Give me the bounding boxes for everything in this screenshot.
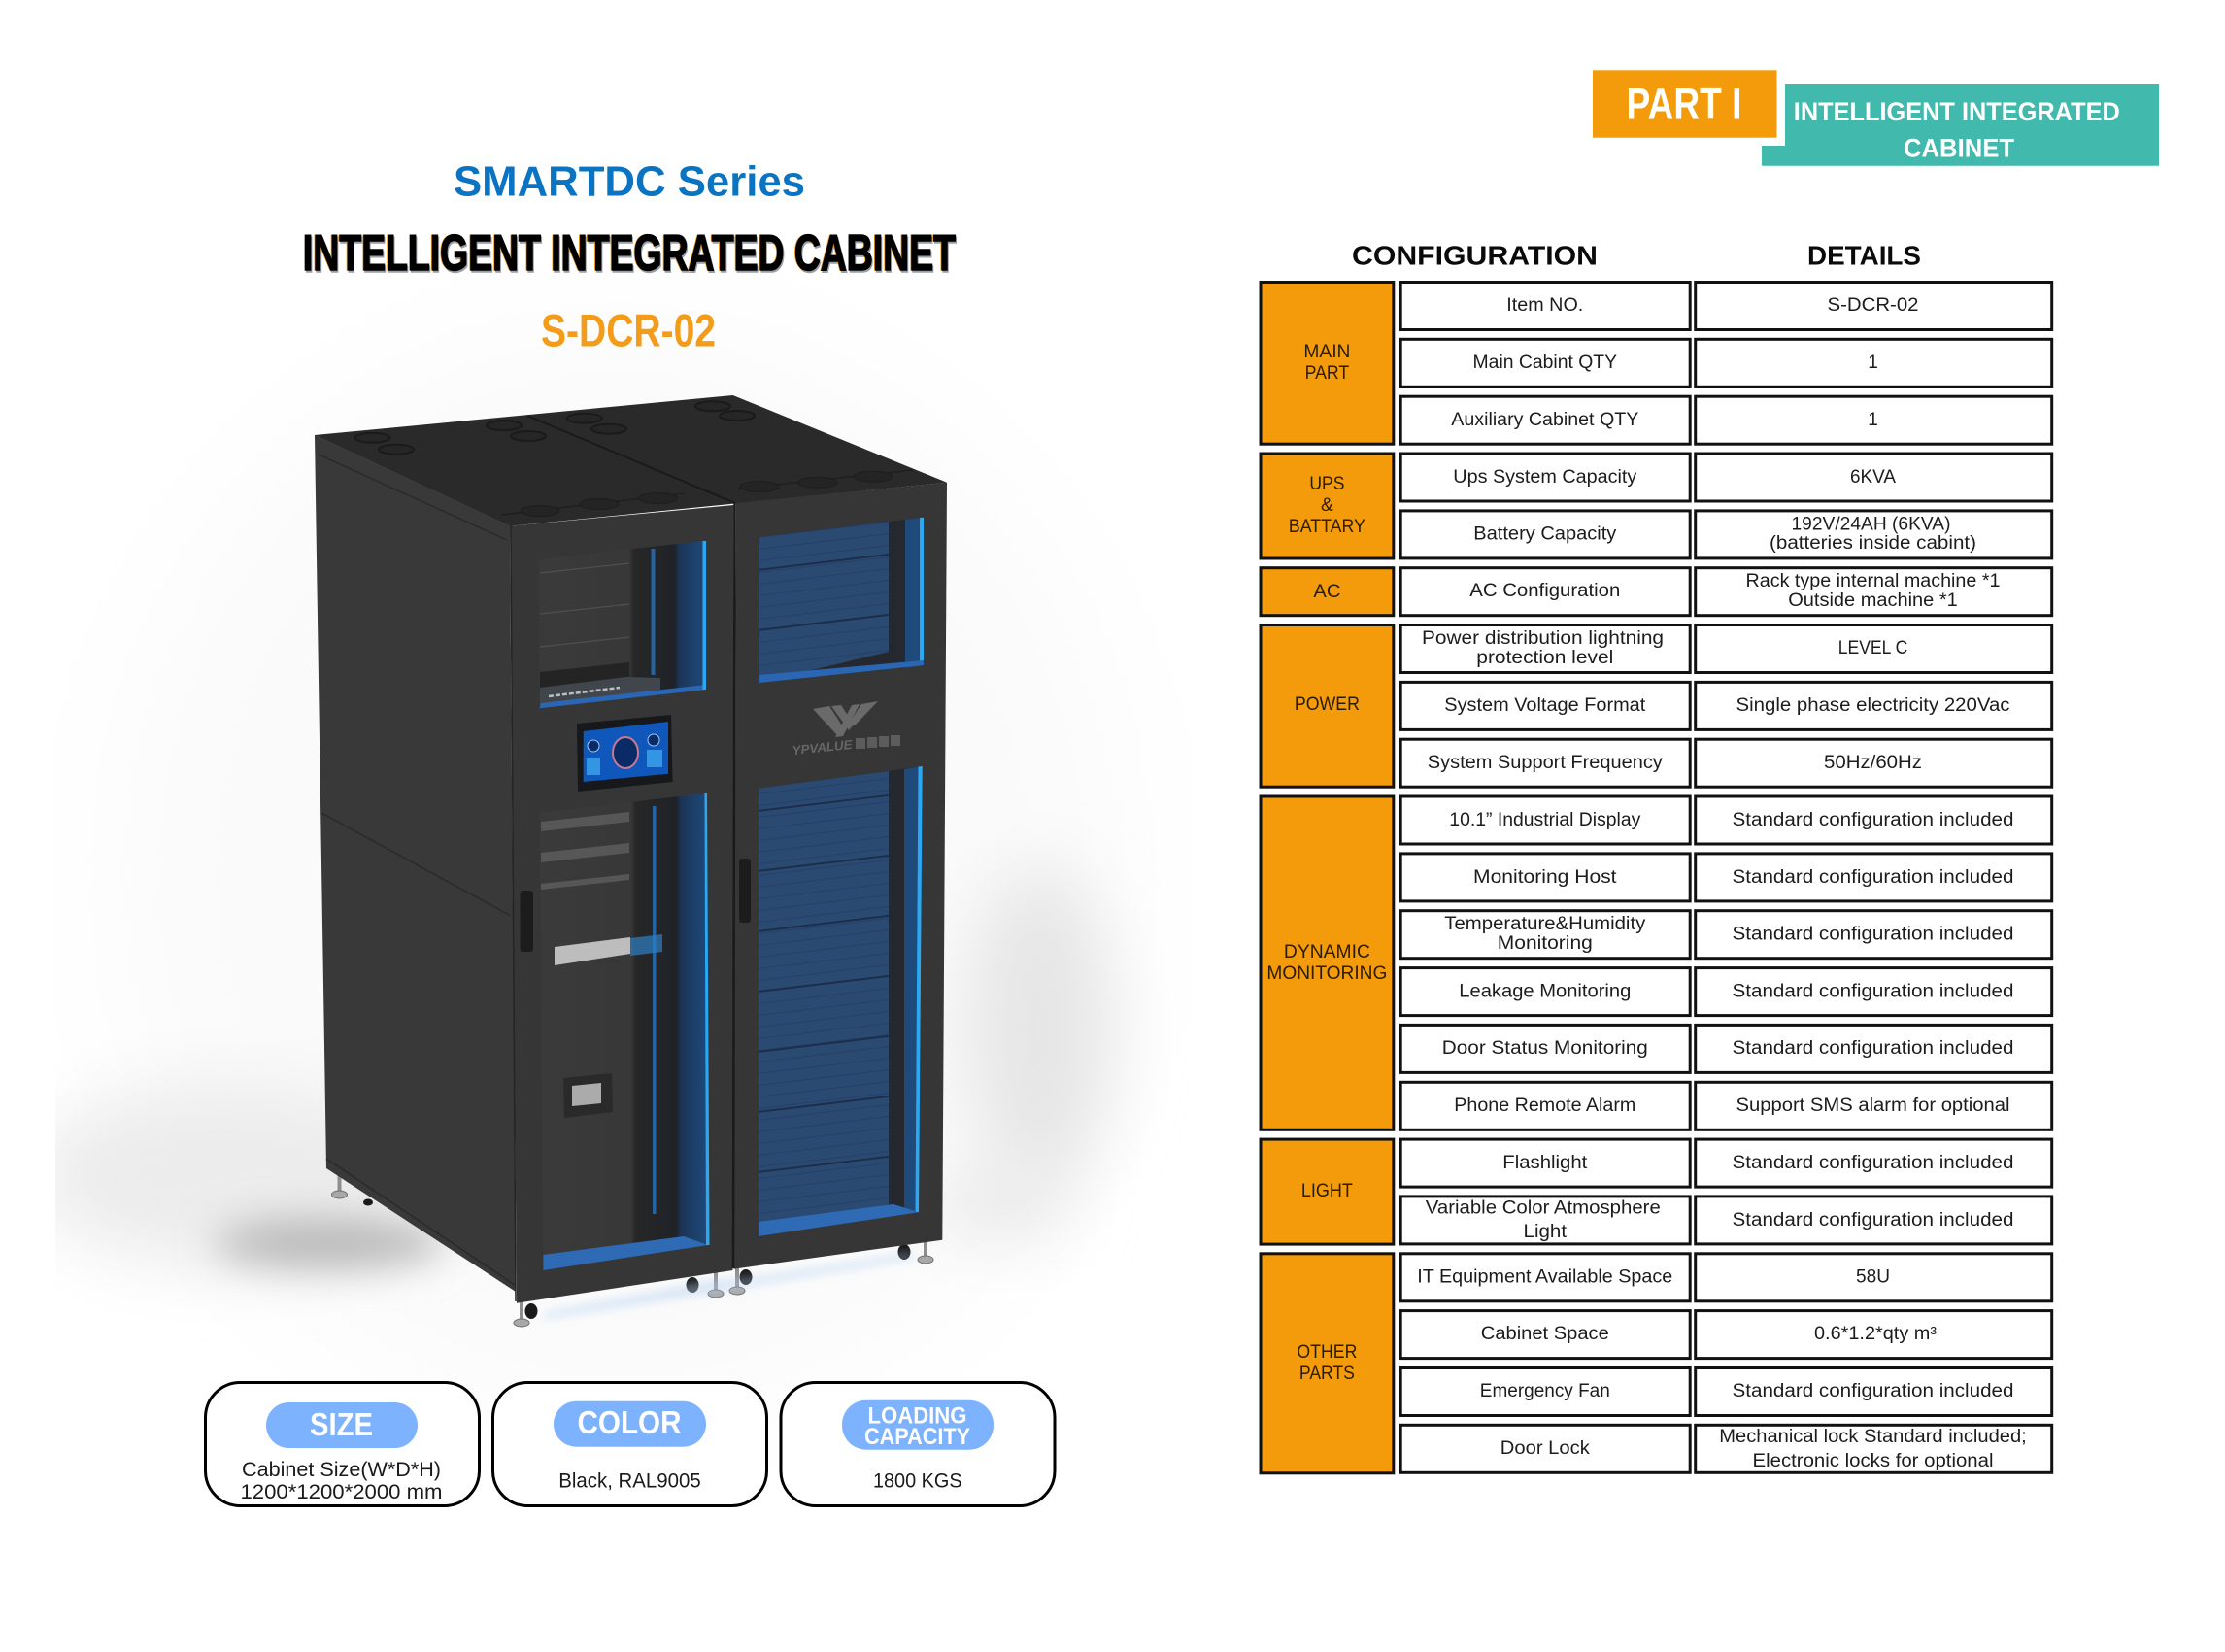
badge: intelligent integrated cabinet bbox=[1762, 84, 2159, 166]
title: Intelligent Integrated Cabinet: INTELLIGENT INTEGRATED CABINET bbox=[303, 225, 956, 282]
badge: Part I bbox=[1593, 70, 1777, 138]
group: other parts: Emergency Fan bbox=[1480, 1381, 1610, 1401]
model number: S-DCR-02 bbox=[541, 305, 716, 356]
group: dynamic monitoring: 10.1” Industrial Display bbox=[1449, 810, 1641, 830]
group: dynamic monitoring: Door Status Monitoring bbox=[1442, 1038, 1648, 1059]
group: main part bbox=[1261, 282, 2052, 444]
group: dynamic monitoring: Support SMS alarm for optional bbox=[1736, 1096, 2010, 1116]
group: other parts: 0.6*1.2*qty m³ bbox=[1814, 1324, 1937, 1344]
table header: configuration: CONFIGURATION bbox=[1352, 241, 1598, 271]
group: main part: Item NO. bbox=[1506, 295, 1583, 316]
group: ac bbox=[1261, 568, 2052, 616]
touch screen bbox=[577, 715, 673, 792]
group: power: System Voltage Format bbox=[1444, 695, 1646, 716]
illustration: cabinet product bbox=[315, 395, 947, 1327]
card: color bbox=[493, 1383, 767, 1505]
group: power: Single phase electricity 220Vac bbox=[1736, 695, 2010, 716]
title: Intelligent Integrated Cabinet: INTELLIGENT INTEGRATED CABINET bbox=[304, 227, 957, 284]
group: main part: S-DCR-02 bbox=[1828, 295, 1919, 316]
group: main part: 1 bbox=[1868, 410, 1878, 430]
group: ups and battery: (batteries inside cabint) bbox=[1770, 533, 1976, 554]
group: main part: 1 bbox=[1868, 353, 1878, 373]
group: power: Power distribution lightning bbox=[1422, 628, 1664, 649]
badge: intelligent integrated cabinet: INTELLIGENT INTEGRATED bbox=[1794, 97, 2120, 126]
group: ups and battery: 6KVA bbox=[1850, 467, 1896, 488]
door handle bbox=[521, 891, 533, 952]
group: ups and battery: UPS bbox=[1309, 474, 1344, 494]
group: ups and battery: 192V/24AH (6KVA) bbox=[1791, 515, 1950, 535]
group: power: protection level bbox=[1476, 648, 1613, 668]
left door bbox=[510, 505, 733, 1303]
card: size: Cabinet Size(W*D*H) bbox=[242, 1459, 441, 1481]
group: light: LIGHT bbox=[1301, 1181, 1353, 1201]
card: loading capacity bbox=[781, 1383, 1055, 1505]
group: dynamic monitoring: Standard configuration included bbox=[1733, 925, 2014, 944]
group: light: Light bbox=[1524, 1222, 1568, 1242]
title: SMARTDC Series: SMARTDC Series bbox=[454, 158, 805, 206]
group: other parts: OTHER bbox=[1297, 1342, 1357, 1363]
group: ups and battery: Battery Capacity bbox=[1473, 523, 1617, 544]
group: dynamic monitoring: DYNAMIC bbox=[1284, 942, 1370, 962]
group: dynamic monitoring: Standard configuration included bbox=[1733, 981, 2014, 1002]
cabinet top bbox=[315, 395, 947, 529]
group: ac: Rack type internal machine *1 bbox=[1746, 571, 2001, 591]
group: other parts: Standard configuration included bbox=[1733, 1381, 2014, 1401]
group: power bbox=[1261, 625, 2052, 787]
group: other parts: Electronic locks for optional bbox=[1752, 1451, 1993, 1471]
group: power: POWER bbox=[1295, 694, 1360, 715]
card: loading capacity: CAPACITY bbox=[864, 1424, 970, 1450]
group: light: Flashlight bbox=[1502, 1153, 1588, 1173]
group: main part: PART bbox=[1305, 363, 1350, 384]
background: soft floor shadow bbox=[55, 845, 1132, 1298]
group: dynamic monitoring: Standard configuration included bbox=[1733, 810, 2014, 830]
logo: YPVALUE bbox=[792, 737, 853, 758]
group: ups and battery: Ups System Capacity bbox=[1453, 467, 1637, 488]
group: light: Standard configuration included bbox=[1733, 1210, 2014, 1231]
upper window bbox=[759, 517, 924, 683]
group: other parts bbox=[1261, 1254, 2052, 1473]
card: color: COLOR bbox=[577, 1404, 682, 1440]
group: light: Standard configuration included bbox=[1733, 1153, 2014, 1173]
group: power: 50Hz/60Hz bbox=[1824, 753, 1922, 773]
group: other parts: Door Lock bbox=[1500, 1438, 1590, 1459]
cabinet side panel bbox=[315, 435, 516, 1292]
group: dynamic monitoring: Temperature&Humidity bbox=[1444, 914, 1646, 934]
group: main part: MAIN bbox=[1303, 342, 1350, 362]
lower window bbox=[748, 758, 923, 1243]
group: main part: Auxiliary Cabinet QTY bbox=[1451, 410, 1639, 430]
group: dynamic monitoring: Monitoring Host bbox=[1473, 867, 1617, 888]
group: light bbox=[1261, 1139, 2052, 1244]
group: light: Variable Color Atmosphere bbox=[1426, 1197, 1661, 1218]
logo bbox=[792, 701, 900, 758]
group: dynamic monitoring: Standard configuration included bbox=[1733, 867, 2014, 888]
group: dynamic monitoring: Standard configuration included bbox=[1733, 1038, 2014, 1059]
group: other parts: Mechanical lock Standard included; bbox=[1719, 1427, 2027, 1447]
card: color: Black, RAL9005 bbox=[558, 1470, 701, 1493]
title: Intelligent Integrated Cabinet: INTELLIGENT INTEGRATED CABINET bbox=[302, 225, 955, 282]
group: other parts: IT Equipment Available Space bbox=[1417, 1266, 1672, 1288]
table header: details: DETAILS bbox=[1807, 241, 1921, 271]
group: dynamic monitoring: Phone Remote Alarm bbox=[1454, 1096, 1635, 1116]
group: ups and battery bbox=[1261, 454, 2052, 558]
badge: Part I: PART I bbox=[1626, 80, 1742, 129]
group: other parts: 58U bbox=[1856, 1266, 1890, 1288]
table: configuration details bbox=[1261, 282, 2052, 1473]
group: power: LEVEL C bbox=[1838, 638, 1907, 658]
floor glow bbox=[544, 1253, 913, 1319]
upper window bbox=[539, 541, 706, 708]
group: ups and battery: BATTARY bbox=[1289, 517, 1365, 537]
door handle bbox=[739, 859, 751, 923]
right door bbox=[733, 483, 947, 1269]
group: dynamic monitoring bbox=[1261, 796, 2052, 1129]
group: dynamic monitoring: Monitoring bbox=[1498, 933, 1593, 954]
badge: intelligent integrated cabinet: CABINET bbox=[1904, 134, 2014, 163]
card: size: SIZE bbox=[310, 1406, 373, 1442]
card: size: 1200*1200*2000 mm bbox=[241, 1481, 443, 1503]
group: other parts: PARTS bbox=[1299, 1364, 1355, 1384]
group: other parts: Cabinet Space bbox=[1481, 1324, 1609, 1344]
card: loading capacity: 1800 KGS bbox=[873, 1470, 962, 1493]
group: ac: AC bbox=[1313, 582, 1340, 602]
group: main part: Main Cabint QTY bbox=[1473, 353, 1617, 373]
card: loading capacity: LOADING bbox=[868, 1403, 967, 1430]
group: power: System Support Frequency bbox=[1428, 753, 1663, 773]
group: ac: Outside machine *1 bbox=[1788, 590, 1958, 611]
group: ups and battery: & bbox=[1321, 495, 1333, 516]
card: size bbox=[206, 1383, 480, 1505]
group: dynamic monitoring: Leakage Monitoring bbox=[1459, 981, 1631, 1002]
lower window bbox=[540, 793, 709, 1270]
group: dynamic monitoring: MONITORING bbox=[1266, 963, 1387, 984]
group: ac: AC Configuration bbox=[1469, 581, 1620, 601]
feet and casters bbox=[332, 1170, 933, 1327]
